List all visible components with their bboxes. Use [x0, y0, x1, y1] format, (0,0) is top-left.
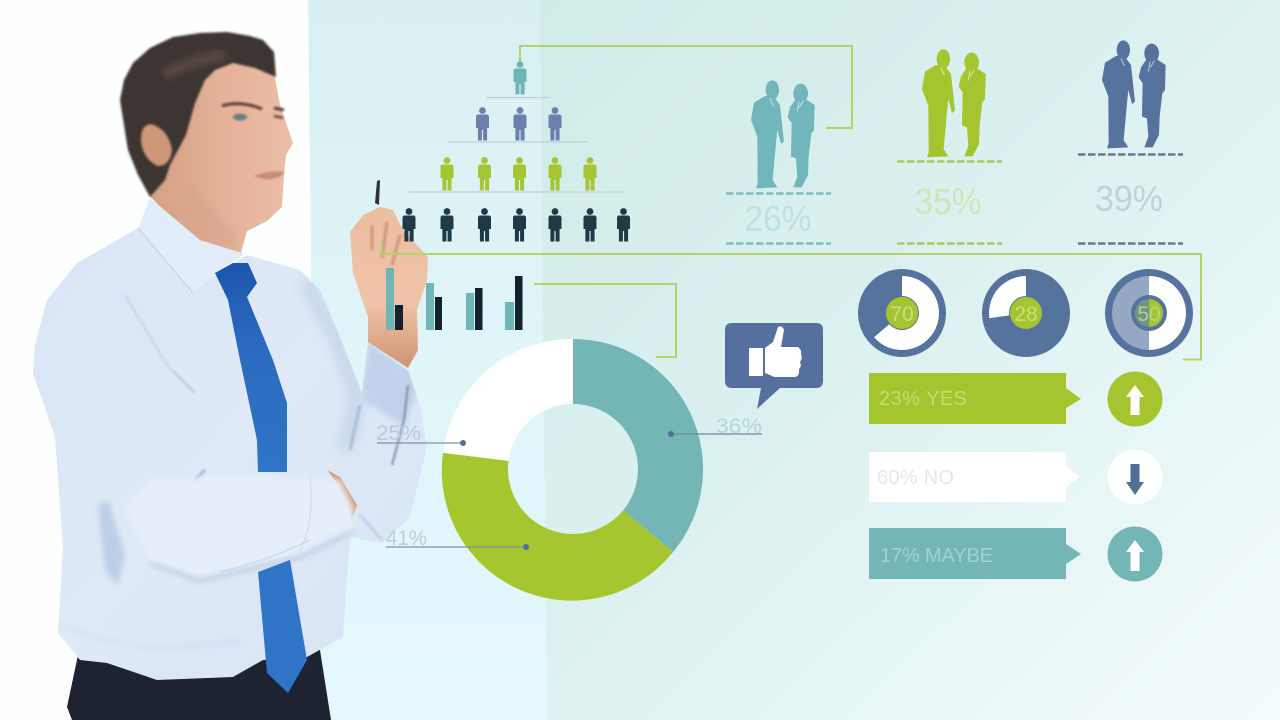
blue couple 39%: 39%: [1095, 178, 1163, 219]
forearm shadow: [150, 530, 353, 580]
shirt collar: [138, 198, 245, 293]
gauge 70: [858, 269, 946, 357]
shirt body: [33, 228, 427, 680]
long green connector line: [382, 243, 1201, 360]
businessman photo illustration: [33, 32, 428, 720]
sleeve folds: [125, 295, 408, 540]
donut label 36%: 36%: [716, 415, 762, 438]
icon: down arrow white: [1108, 450, 1162, 504]
row 2 slate: [476, 107, 562, 140]
segment 25% white: [443, 339, 573, 461]
tie upper: [215, 263, 287, 472]
row 1 teal: [514, 61, 526, 94]
gauge 28: [982, 269, 1070, 357]
icon: up arrow teal: [1108, 526, 1162, 582]
pyramid of people: [402, 61, 630, 241]
eye and brow: [222, 104, 284, 120]
donut label 41%: 41%: [386, 527, 427, 550]
gauge 50: [1105, 269, 1193, 357]
bar chart connector line: [534, 284, 676, 357]
segment 36% teal: [573, 339, 703, 552]
shirt hem shading: [60, 625, 240, 647]
trousers: [67, 650, 331, 720]
gauge 50: 50: [1137, 303, 1161, 326]
poll row: yes: [869, 372, 1162, 426]
teal couple 26%: 26%: [744, 198, 812, 239]
raised hand: [350, 207, 428, 368]
segment 41% green: [442, 453, 673, 601]
pen: [375, 180, 380, 205]
crossed hand: [327, 470, 357, 520]
donut label 25%: [376, 422, 466, 446]
bar chart: [386, 268, 522, 330]
neck and face: [150, 60, 293, 256]
tie lower: [258, 560, 307, 693]
cuff shading: [362, 342, 418, 425]
icon: thumbs up speech bubble: [725, 323, 823, 409]
gauge 28: 28: [1014, 303, 1038, 326]
donut label 41%: [386, 527, 529, 550]
row 3 green: [440, 157, 596, 190]
poll row: maybe: [869, 526, 1162, 582]
silhouettes with percentages: [726, 40, 1183, 243]
hair: [120, 32, 276, 197]
jaw and neck shadow: [170, 185, 238, 250]
blue couple 39%: [1078, 40, 1183, 243]
poll row: maybe: 17% MAYBE: [880, 545, 993, 567]
row 4 dark: [402, 208, 630, 242]
green couple 35%: 35%: [914, 181, 982, 222]
gauge 70: 70: [890, 303, 914, 326]
ear: [141, 124, 172, 166]
forearm: [125, 475, 355, 577]
donut chart: [442, 339, 703, 601]
donut label 25%: 25%: [376, 422, 421, 445]
donut label 36%: [668, 415, 762, 438]
gauge rings: [858, 269, 1193, 357]
poll row: yes: 23% YES: [879, 388, 967, 410]
poll row: no: [869, 450, 1162, 504]
shirt shading: [305, 280, 358, 450]
lips: [254, 172, 284, 179]
teal couple 26%: [726, 80, 831, 243]
icon: up arrow green: [1108, 372, 1162, 426]
pyramid connector line: [520, 46, 852, 128]
green couple 35%: [897, 49, 1002, 243]
poll row: no: 60% NO: [877, 467, 954, 489]
